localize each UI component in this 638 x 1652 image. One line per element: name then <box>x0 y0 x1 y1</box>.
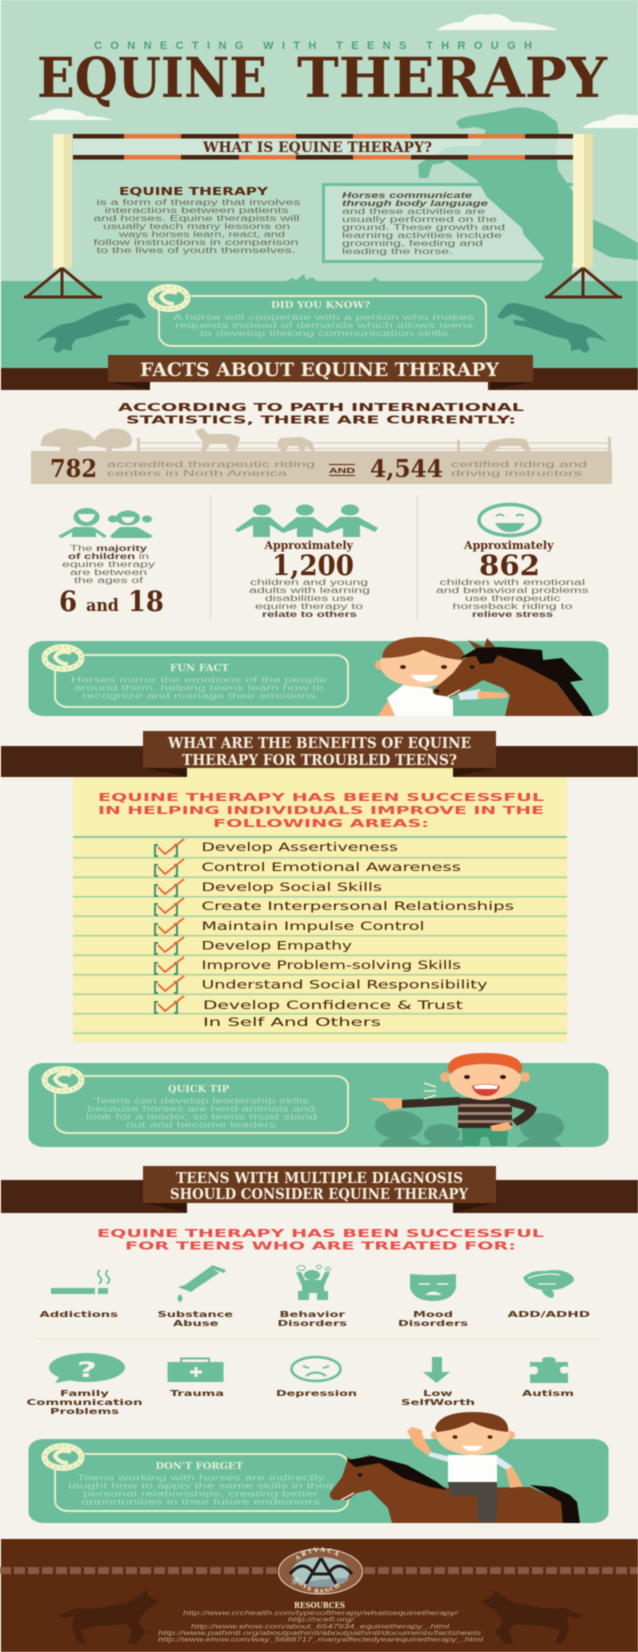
text block: body language: ground. These growth and <box>342 223 505 232</box>
labels row 1: Abuse <box>173 1318 219 1328</box>
stat: 1,200: children and young <box>250 578 368 587</box>
panel: don't forget: personal relationships, creating better <box>83 1490 319 1498</box>
checklist items: Improve Problem-solving Skills <box>202 958 461 972</box>
lower rail <box>73 155 573 160</box>
stats band: driving instructors <box>451 468 582 478</box>
pasture silhouettes <box>41 428 611 451</box>
panel: quick tip: Teens can develop leadership skills <box>94 1096 309 1106</box>
left stand <box>24 268 102 297</box>
trees <box>41 428 132 451</box>
labels row 1: Disorders <box>278 1318 347 1328</box>
callout: did you know <box>147 284 486 346</box>
icon: stressed person <box>296 1265 330 1300</box>
resources <box>158 1600 484 1644</box>
section banner: multiple diagnosis: SHOULD CONSIDER EQUINE THERAPY <box>170 1186 469 1203</box>
checklist items: Control Emotional Awareness <box>202 860 461 874</box>
section banner: facts: FACTS ABOUT EQUINE THERAPY <box>140 359 499 381</box>
text block: body language: leading the horse. <box>342 247 453 256</box>
stat: 862: use therapeutic <box>465 594 560 603</box>
stat: 862: Approximately <box>463 539 554 552</box>
panel: don't forget: DON'T FORGET <box>156 1461 243 1472</box>
resources: http://www.ehow.com/way_5688717_manyaffectedyearequinetherapy_.html <box>158 1636 484 1644</box>
panel: notepad <box>73 768 567 1042</box>
labels row 1: Mood <box>413 1309 453 1319</box>
stat: 1,200: relate to others <box>262 610 358 619</box>
panel: quick tip: look for a leader, so teens must stand <box>86 1112 317 1122</box>
labels row 1: Addictions <box>40 1309 118 1319</box>
icon: sad mask <box>410 1274 456 1301</box>
text block: equine therapy definition: to the lives of youth themselves. <box>96 246 296 255</box>
resources: http://ncefl.org/ <box>288 1616 356 1624</box>
labels row 1: Disorders <box>398 1318 468 1328</box>
illustration: boy riding horse <box>330 1412 580 1523</box>
resources: RESOURCES <box>294 1600 345 1610</box>
logo: BOYS RANCH <box>293 1577 340 1594</box>
callout: did you know: A horse will cooperate with a person who makes <box>173 313 474 322</box>
stat: 862 <box>436 539 588 619</box>
stat: ages 6 and 18: 6 and 18 <box>59 585 164 618</box>
main title: THERAPY <box>297 45 608 110</box>
subtitle: CONNECTING WITH TEENS THROUGH <box>94 40 532 52</box>
text block: majority: equine therapy <box>62 560 155 569</box>
section banner: multiple diagnosis <box>1 1166 638 1213</box>
checklist items: Create Interpersonal Relationships <box>202 899 514 913</box>
heading: treated for: EQUINE THERAPY HAS BEEN SUCCESSFUL <box>97 1227 544 1240</box>
labels row 1: Substance <box>158 1309 234 1319</box>
panel: fun fact: Horses mirror the emotions of the people <box>71 676 328 684</box>
text block: equine therapy definition: EQUINE THERAPY <box>119 185 269 198</box>
heading: path statistics <box>118 401 524 426</box>
labels row 2: Low <box>423 1388 453 1398</box>
fence <box>137 437 611 451</box>
panel: fun fact: FUN FACT <box>170 663 229 674</box>
callout: did you know: requests instead of demands which allows teens <box>175 321 473 330</box>
panel: don't forget: opportunities in their future endeavors <box>81 1498 320 1506</box>
grass tufts <box>285 274 380 282</box>
icon: children <box>58 508 153 538</box>
checklist items: Develop Social Skills <box>202 880 382 894</box>
stats band: 782 <box>50 454 97 483</box>
right stand <box>545 268 622 297</box>
and separator <box>329 464 356 476</box>
icon: jumping horse right <box>497 303 607 353</box>
icon: speech bubble question <box>49 1353 125 1383</box>
stat: 1,200: 1,200 <box>272 549 354 582</box>
icon: horse silhouette left <box>58 1590 160 1645</box>
text block: equine therapy definition: interactions between patients <box>104 206 288 215</box>
cloud: right <box>582 115 638 128</box>
checklist items: Develop Empathy <box>202 938 352 952</box>
icon: speech bubble question: ? <box>77 1358 97 1382</box>
text block: equine therapy definition <box>94 185 300 255</box>
text block: body language <box>342 191 505 256</box>
text block: equine therapy definition: is a form of therapy that involves <box>96 198 300 207</box>
heading: FOLLOWING AREAS: <box>213 817 429 830</box>
stat: 1,200 <box>249 539 370 619</box>
labels row 2: Family <box>60 1388 110 1398</box>
labels row 2: SelfWorth <box>401 1397 475 1407</box>
text block: body language: and these activities are <box>342 207 486 216</box>
stat: 1,200: equine therapy to <box>255 602 364 611</box>
heading <box>98 791 544 830</box>
resources: http://www.crchealth.com/typesoftherapy/whatisequinetherapy/ <box>183 1610 460 1617</box>
stat: 1,200: Approximately <box>264 539 354 552</box>
ground <box>1 281 638 371</box>
icon: rearing horse silhouette <box>418 107 638 282</box>
heading: what is equine therapy: WHAT IS EQUINE THERAPY? <box>202 140 432 156</box>
text block: majority: of children in <box>68 552 149 561</box>
icon: sad face <box>292 1357 340 1381</box>
text block: equine therapy definition: usually teach many lessons on <box>103 222 290 231</box>
section banner: facts <box>1 355 638 390</box>
text block: body language: learning activities include <box>342 231 503 240</box>
checklist items <box>155 839 514 1029</box>
panel: fun fact <box>28 637 608 716</box>
text block: body language: grooming, feeding and <box>342 239 483 248</box>
section banner: benefits: THERAPY FOR TROUBLED TEENS? <box>182 752 457 769</box>
icon: horseshoe <box>41 1066 85 1094</box>
section banner: benefits <box>1 731 638 777</box>
rail panel <box>73 138 573 155</box>
horse <box>433 638 583 716</box>
horse 1 <box>195 428 240 451</box>
panel: quick tip: out and become leaders <box>126 1120 276 1130</box>
logo <box>277 1546 364 1596</box>
stat: 862: and behavioral problems <box>436 586 588 595</box>
text block: body language: through body language <box>342 199 489 208</box>
crowd silhouettes <box>375 1111 564 1147</box>
icon: syringe <box>178 1265 226 1302</box>
icon: three people <box>235 504 378 537</box>
stats band: certified riding and <box>451 459 588 469</box>
text block: majority: are between <box>70 568 147 577</box>
icon: horseshoe <box>41 1443 85 1471</box>
stat: 862: relieve stress <box>472 610 554 619</box>
text block: equine therapy definition: ways horses learn, react, and <box>117 230 285 239</box>
text block: body language: Horses communicate <box>342 191 473 200</box>
panel: fun fact: recognize and manage their emotions <box>82 692 316 700</box>
icon: smiley <box>479 504 540 536</box>
text block: body language: usually performed on the <box>342 215 498 224</box>
text block: equine therapy definition: and horses. Equine therapists will <box>94 214 300 223</box>
icon: whirlwind head <box>523 1270 574 1298</box>
left post <box>53 134 72 268</box>
sky background <box>1 0 638 282</box>
hurdle <box>24 134 622 297</box>
callout: did you know: to develop lifelong communication skills <box>200 329 448 338</box>
icon: first aid kit <box>168 1358 224 1382</box>
resources: http://www.ehow.com/about_6547934_equinetherapy_.html <box>191 1624 450 1630</box>
labels row 2: Trauma <box>170 1388 224 1398</box>
panel: don't forget: taught how to apply the same skills in their <box>68 1482 335 1490</box>
panel: quick tip: QUICK TIP <box>168 1084 229 1095</box>
section banner: multiple diagnosis: TEENS WITH MULTIPLE DIAGNOSIS <box>176 1170 463 1187</box>
stat: 862: horseback riding to <box>452 602 573 611</box>
checklist items: Develop Assertiveness <box>202 840 398 854</box>
cloud: top right <box>436 14 558 30</box>
footer <box>0 1538 638 1652</box>
heading: path statistics: ACCORDING TO PATH INTERNATIONAL <box>118 401 524 414</box>
panel: quick tip <box>28 1053 608 1147</box>
heading: treated for: FOR TEENS WHO ARE TREATED FOR: <box>125 1240 516 1252</box>
illustration: pointing boy <box>369 1053 564 1147</box>
heading: treated for <box>97 1227 544 1252</box>
icon: horseshoe <box>147 284 191 312</box>
logo: ARIVACA <box>296 1546 339 1561</box>
text block: equine therapy definition: follow instructions in comparison <box>94 238 298 247</box>
stats band: accredited therapeutic riding <box>107 459 316 469</box>
and separator: AND <box>329 466 356 475</box>
stat: 862: 862 <box>479 549 540 582</box>
note box on the right <box>322 183 573 263</box>
panel: don't forget: Teens working with horses are indirectly <box>77 1474 324 1482</box>
panel: fun fact: around them, helping teens learn how to <box>74 684 325 692</box>
panel: don't forget <box>28 1412 608 1523</box>
text block: majority: the ages of <box>74 576 144 585</box>
illustration: boy with horse <box>375 637 593 716</box>
stats band <box>31 451 612 484</box>
stats band: centers in North America <box>107 468 288 478</box>
callout: did you know: DID YOU KNOW? <box>271 300 370 311</box>
stats band: 4,544 <box>370 454 443 483</box>
labels row 2: Communication <box>26 1397 143 1407</box>
labels row 1: ADD/ADHD <box>508 1309 590 1319</box>
stat: 862: children with emotional <box>440 578 585 587</box>
checklist items: Understand Social Responsibility <box>202 978 488 992</box>
icon: jumping horse left <box>36 303 146 353</box>
heading: EQUINE THERAPY HAS BEEN SUCCESSFUL <box>98 791 544 804</box>
icon: cigarette <box>51 1270 109 1294</box>
checklist items: In Self And Others <box>203 1015 381 1029</box>
labels row 2: Autism <box>522 1388 574 1398</box>
top rail <box>73 134 573 138</box>
horse 2 <box>277 437 315 451</box>
labels row 2: Depression <box>276 1388 357 1398</box>
icon: puzzle piece <box>530 1357 568 1383</box>
section banner: benefits: WHAT ARE THE BENEFITS OF EQUINE <box>167 735 471 752</box>
main title: EQUINE <box>37 45 267 110</box>
icon: horseshoe <box>41 644 85 672</box>
icon: horse silhouette right <box>481 1590 583 1645</box>
panel: quick tip: because horses are herd animals and <box>88 1104 315 1114</box>
main title <box>37 45 608 110</box>
text block: majority <box>62 544 155 585</box>
right post <box>573 134 593 268</box>
rope band <box>0 1567 638 1574</box>
resources: http://www.pathintl.org/aboutpathintl/aboutpathintl/documents/factsheets <box>158 1630 482 1637</box>
stat: 1,200: disabilities use <box>265 594 355 603</box>
horse 3 <box>482 438 531 451</box>
labels row 1 <box>40 1309 590 1328</box>
checklist items: Maintain Impulse Control <box>202 919 424 933</box>
icon: down arrow <box>423 1357 450 1383</box>
cloud: left <box>28 109 114 120</box>
heading: IN HELPING INDIVIDUALS IMPROVE IN THE <box>98 804 544 817</box>
labels row 2: Problems <box>50 1406 119 1416</box>
checklist items: Develop Confidence & Trust <box>203 998 464 1012</box>
text block: majority: The majority <box>70 544 148 553</box>
labels row 2 <box>26 1388 574 1416</box>
heading: path statistics: STATISTICS, THERE ARE CURRENTLY: <box>126 414 516 426</box>
labels row 1: Behavior <box>280 1309 346 1319</box>
stat: 1,200: adults with learning <box>249 586 370 595</box>
